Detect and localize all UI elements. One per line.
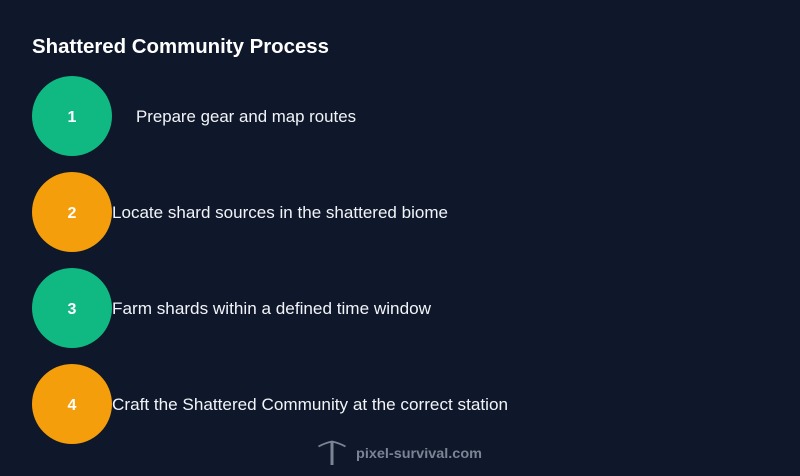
step 1 text: Prepare gear and map routes	[136, 108, 356, 126]
icon: pickaxe	[318, 441, 346, 465]
step 4 number: 4	[68, 397, 77, 414]
title: Shattered Community Process	[32, 35, 329, 58]
step 1 number: 1	[68, 109, 77, 126]
site name: pixel-survival.com	[356, 445, 482, 461]
step 3	[32, 268, 431, 348]
step 4 text: Craft the Shattered Community at the correct station	[112, 396, 508, 414]
step 4 badge	[32, 364, 112, 444]
step 4	[32, 364, 508, 444]
step 1	[32, 76, 356, 156]
step 2 text: Locate shard sources in the shattered biome	[112, 204, 448, 222]
step 2 number: 2	[68, 205, 77, 222]
step 3 text: Farm shards within a defined time window	[112, 300, 431, 318]
step 3 number: 3	[68, 301, 77, 318]
step 3 badge	[32, 268, 112, 348]
step 2 badge	[32, 172, 112, 252]
step 1 badge	[32, 76, 112, 156]
footer watermark	[318, 441, 482, 465]
step 2	[32, 172, 448, 252]
